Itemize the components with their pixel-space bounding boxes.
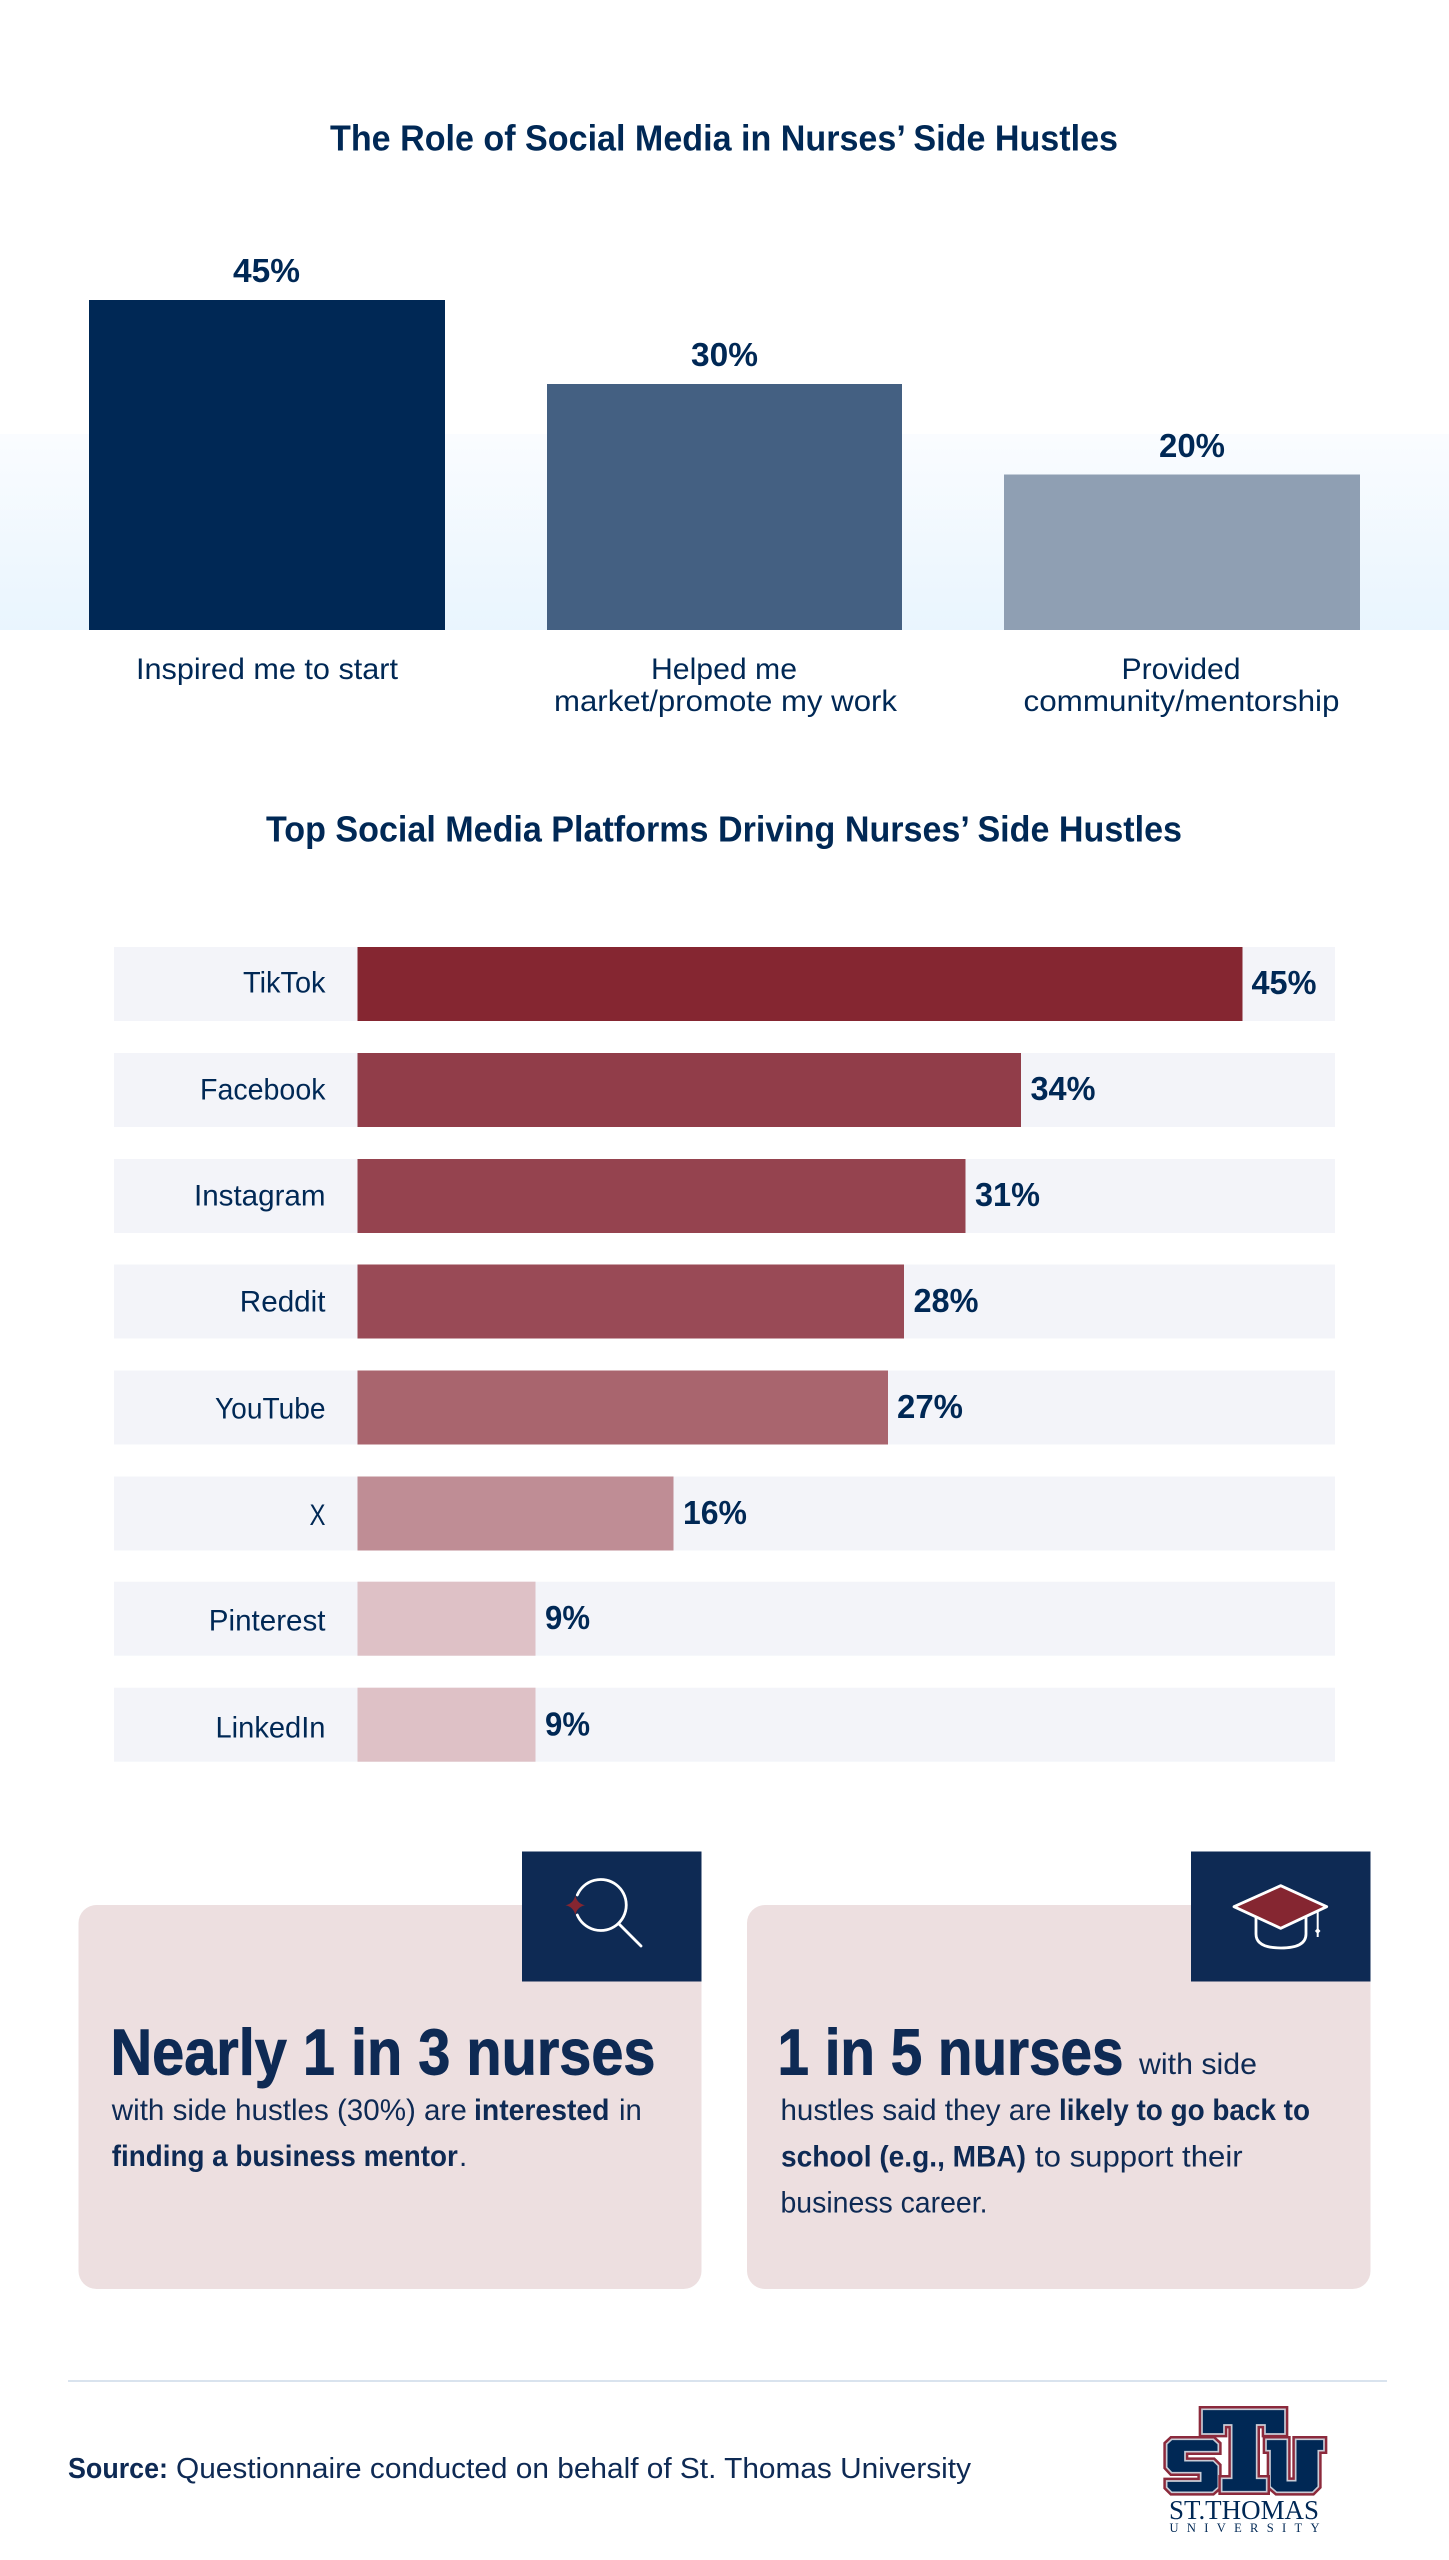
logo: St. Thomas University: ST.THOMAS (1169, 2494, 1319, 2525)
heading: Nearly 1 in 3 nurses: Nearly 1 in 3 nurses (110, 2015, 656, 2088)
bar: community 20%: community/mentorship (1024, 685, 1340, 718)
row: TikTok (114, 947, 1335, 1021)
row: YouTube: YouTube (215, 1393, 326, 1426)
bar: community 20%: 20% (1159, 428, 1225, 465)
source line: Questionnaire conducted on behalf of St. Thomas University (176, 2453, 972, 2485)
icon: magnifying glass (522, 1852, 702, 1982)
row: LinkedIn: 9% (545, 1707, 590, 1744)
title: The Role of Social Media: The Role of Social Media in Nurses’ Side Hustles (330, 118, 1118, 158)
bar: market/promote 30%: 30% (691, 337, 758, 374)
panel: back to school callout (747, 1852, 1370, 2289)
bar: market/promote 30%: market/promote my work (554, 685, 898, 718)
text: school body: business career. (780, 2187, 988, 2220)
bar: community 20%: Provided (1122, 653, 1240, 686)
column chart: role of social media (89, 253, 1360, 718)
bar: inspired 45%: Inspired me to start (136, 653, 399, 686)
text: mentor body: with side hustles (30%) are (111, 2094, 467, 2127)
row: Facebook: 34% (1030, 1071, 1096, 1108)
bar: inspired 45% (89, 253, 445, 686)
row: X: X (310, 1499, 326, 1532)
row: YouTube: 27% (897, 1389, 963, 1426)
bar: market/promote 30%: Helped me (651, 653, 797, 686)
text: school body (780, 2048, 1310, 2220)
logo: St. Thomas University (1167, 2409, 1324, 2535)
logo: St. Thomas University: UNIVERSITY (1170, 2521, 1320, 2535)
row: LinkedIn (114, 1688, 1335, 1762)
text: mentor body: interested (474, 2094, 610, 2127)
text: school body: with side (1138, 2048, 1257, 2081)
row: Facebook (114, 1053, 1335, 1127)
text: mentor body (111, 2094, 642, 2173)
text: mentor body: finding a business mentor (112, 2140, 458, 2173)
bar chart: platforms (114, 947, 1335, 1762)
row: Facebook: Facebook (200, 1073, 326, 1106)
text: mentor body: in (619, 2094, 642, 2127)
row: Instagram: Instagram (194, 1179, 326, 1212)
row: TikTok: TikTok (243, 967, 326, 1000)
bar: inspired 45%: 45% (233, 253, 300, 290)
text: school body: to support their (1035, 2140, 1243, 2174)
row: Reddit: Reddit (240, 1286, 326, 1319)
bar: community 20% (1004, 428, 1360, 718)
row: Pinterest (114, 1582, 1335, 1656)
row: X (114, 1476, 1335, 1550)
row: LinkedIn: LinkedIn (216, 1712, 326, 1745)
row: X: 16% (683, 1495, 747, 1532)
heading: 1 in 5 nurses: 1 in 5 nurses (778, 2015, 1124, 2088)
title: Top Social Media Platforms: Top Social Media Platforms Driving Nurses’ Side Hustles (266, 808, 1182, 850)
row: Pinterest: Pinterest (209, 1605, 326, 1638)
icon: graduation cap (1191, 1852, 1370, 1982)
row: Instagram: 31% (975, 1177, 1040, 1214)
row: YouTube (114, 1370, 1335, 1444)
row: Pinterest: 9% (545, 1600, 590, 1637)
row: Reddit (114, 1264, 1335, 1338)
source line: Source: (68, 2453, 168, 2485)
text: school body: school (e.g., MBA) (781, 2140, 1026, 2174)
panel: business mentor callout (78, 1852, 702, 2289)
text: school body: likely to go back to (1059, 2094, 1310, 2127)
bar: market/promote 30% (547, 337, 902, 718)
text: school body: hustles said they are (780, 2094, 1052, 2127)
text: mentor body: . (459, 2140, 467, 2173)
row: Reddit: 28% (914, 1283, 978, 1320)
row: Instagram (114, 1159, 1335, 1233)
row: TikTok: 45% (1252, 965, 1316, 1002)
